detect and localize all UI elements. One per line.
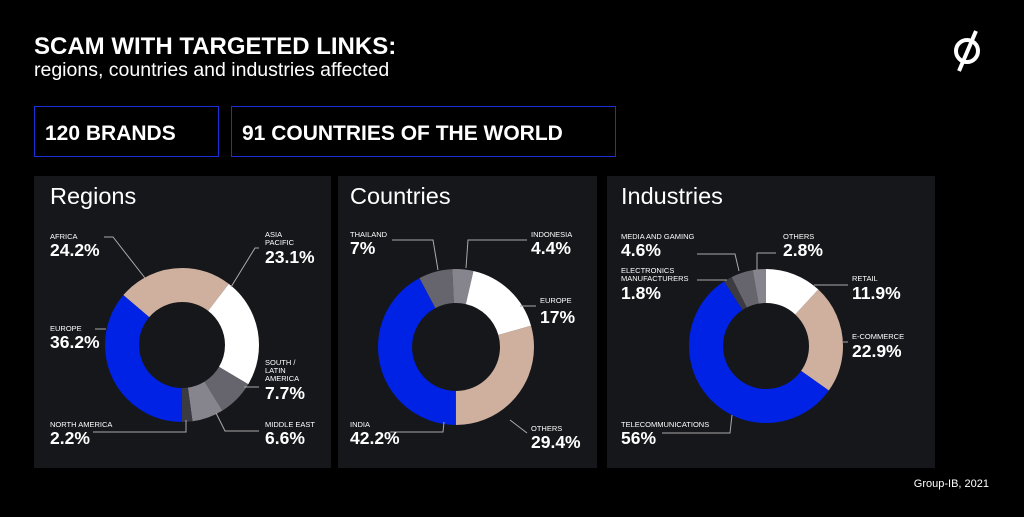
panel: countries: 4.4% — [531, 238, 571, 258]
panel: countries: INDIA — [350, 420, 370, 429]
panel: industries: 2.8% — [783, 240, 823, 260]
panel: industries: ELECTRONICS — [621, 266, 674, 275]
panel: countries: Countries — [350, 183, 451, 209]
donut: industries — [706, 286, 826, 406]
panel: industries: MANUFACTURERS — [621, 274, 689, 283]
title: SCAM WITH TARGETED LINKS: — [34, 33, 396, 60]
panel: industries: OTHERS — [783, 232, 814, 241]
panel: countries: OTHERS — [531, 424, 562, 433]
panel: regions — [34, 176, 331, 468]
panel: industries: 4.6% — [621, 240, 661, 260]
panel: regions: ASIA — [265, 230, 282, 239]
title — [34, 33, 396, 81]
panel: regions: AMERICA — [265, 374, 299, 383]
box: brands — [34, 106, 218, 156]
panel: regions: 7.7% — [265, 383, 305, 403]
panel: industries: 11.9% — [852, 283, 901, 303]
panel: industries: E-COMMERCE — [852, 332, 904, 341]
panel: countries: INDONESIA — [531, 230, 572, 239]
panel: industries: TELECOMMUNICATIONS — [621, 420, 709, 429]
panel: regions: 6.6% — [265, 428, 305, 448]
panel: countries: 29.4% — [531, 432, 581, 452]
panel: regions: 2.2% — [50, 428, 90, 448]
panel: regions: PACIFIC — [265, 238, 295, 247]
panel: regions: AFRICA — [50, 232, 78, 241]
panel: regions: LATIN — [265, 366, 286, 375]
logo — [956, 31, 978, 71]
box: brands: 120 BRANDS — [45, 122, 176, 145]
panel: industries: MEDIA AND GAMING — [621, 232, 695, 241]
panel: industries: 22.9% — [852, 341, 902, 361]
donut: countries — [395, 286, 517, 408]
panel: regions: Regions — [50, 183, 136, 209]
panel: regions: 23.1% — [265, 247, 315, 267]
panel: regions: 24.2% — [50, 240, 100, 260]
panel: industries: 1.8% — [621, 283, 661, 303]
box: countries — [232, 106, 616, 156]
title: regions, countries and industries affected — [34, 59, 389, 81]
panel: countries: 17% — [540, 307, 575, 327]
panel: countries: EUROPE — [540, 296, 572, 305]
panel: regions: NORTH AMERICA — [50, 420, 112, 429]
box: countries: 91 COUNTRIES OF THE WORLD — [242, 122, 563, 145]
footer credit: Group-IB, 2021 — [914, 478, 989, 490]
panel: countries: 42.2% — [350, 428, 400, 448]
panel: regions: 36.2% — [50, 332, 100, 352]
panel: industries: RETAIL — [852, 274, 878, 283]
panel: industries: Industries — [621, 183, 723, 209]
panel: regions: MIDDLE EAST — [265, 420, 315, 429]
panel: regions: EUROPE — [50, 324, 82, 333]
panel: countries: THAILAND — [350, 230, 388, 239]
panel: regions: SOUTH / — [265, 358, 296, 367]
panel: industries — [607, 176, 935, 468]
panel: countries — [338, 176, 597, 468]
panel: countries: 7% — [350, 238, 376, 258]
panel: industries: 56% — [621, 428, 656, 448]
donut: regions — [122, 285, 242, 405]
